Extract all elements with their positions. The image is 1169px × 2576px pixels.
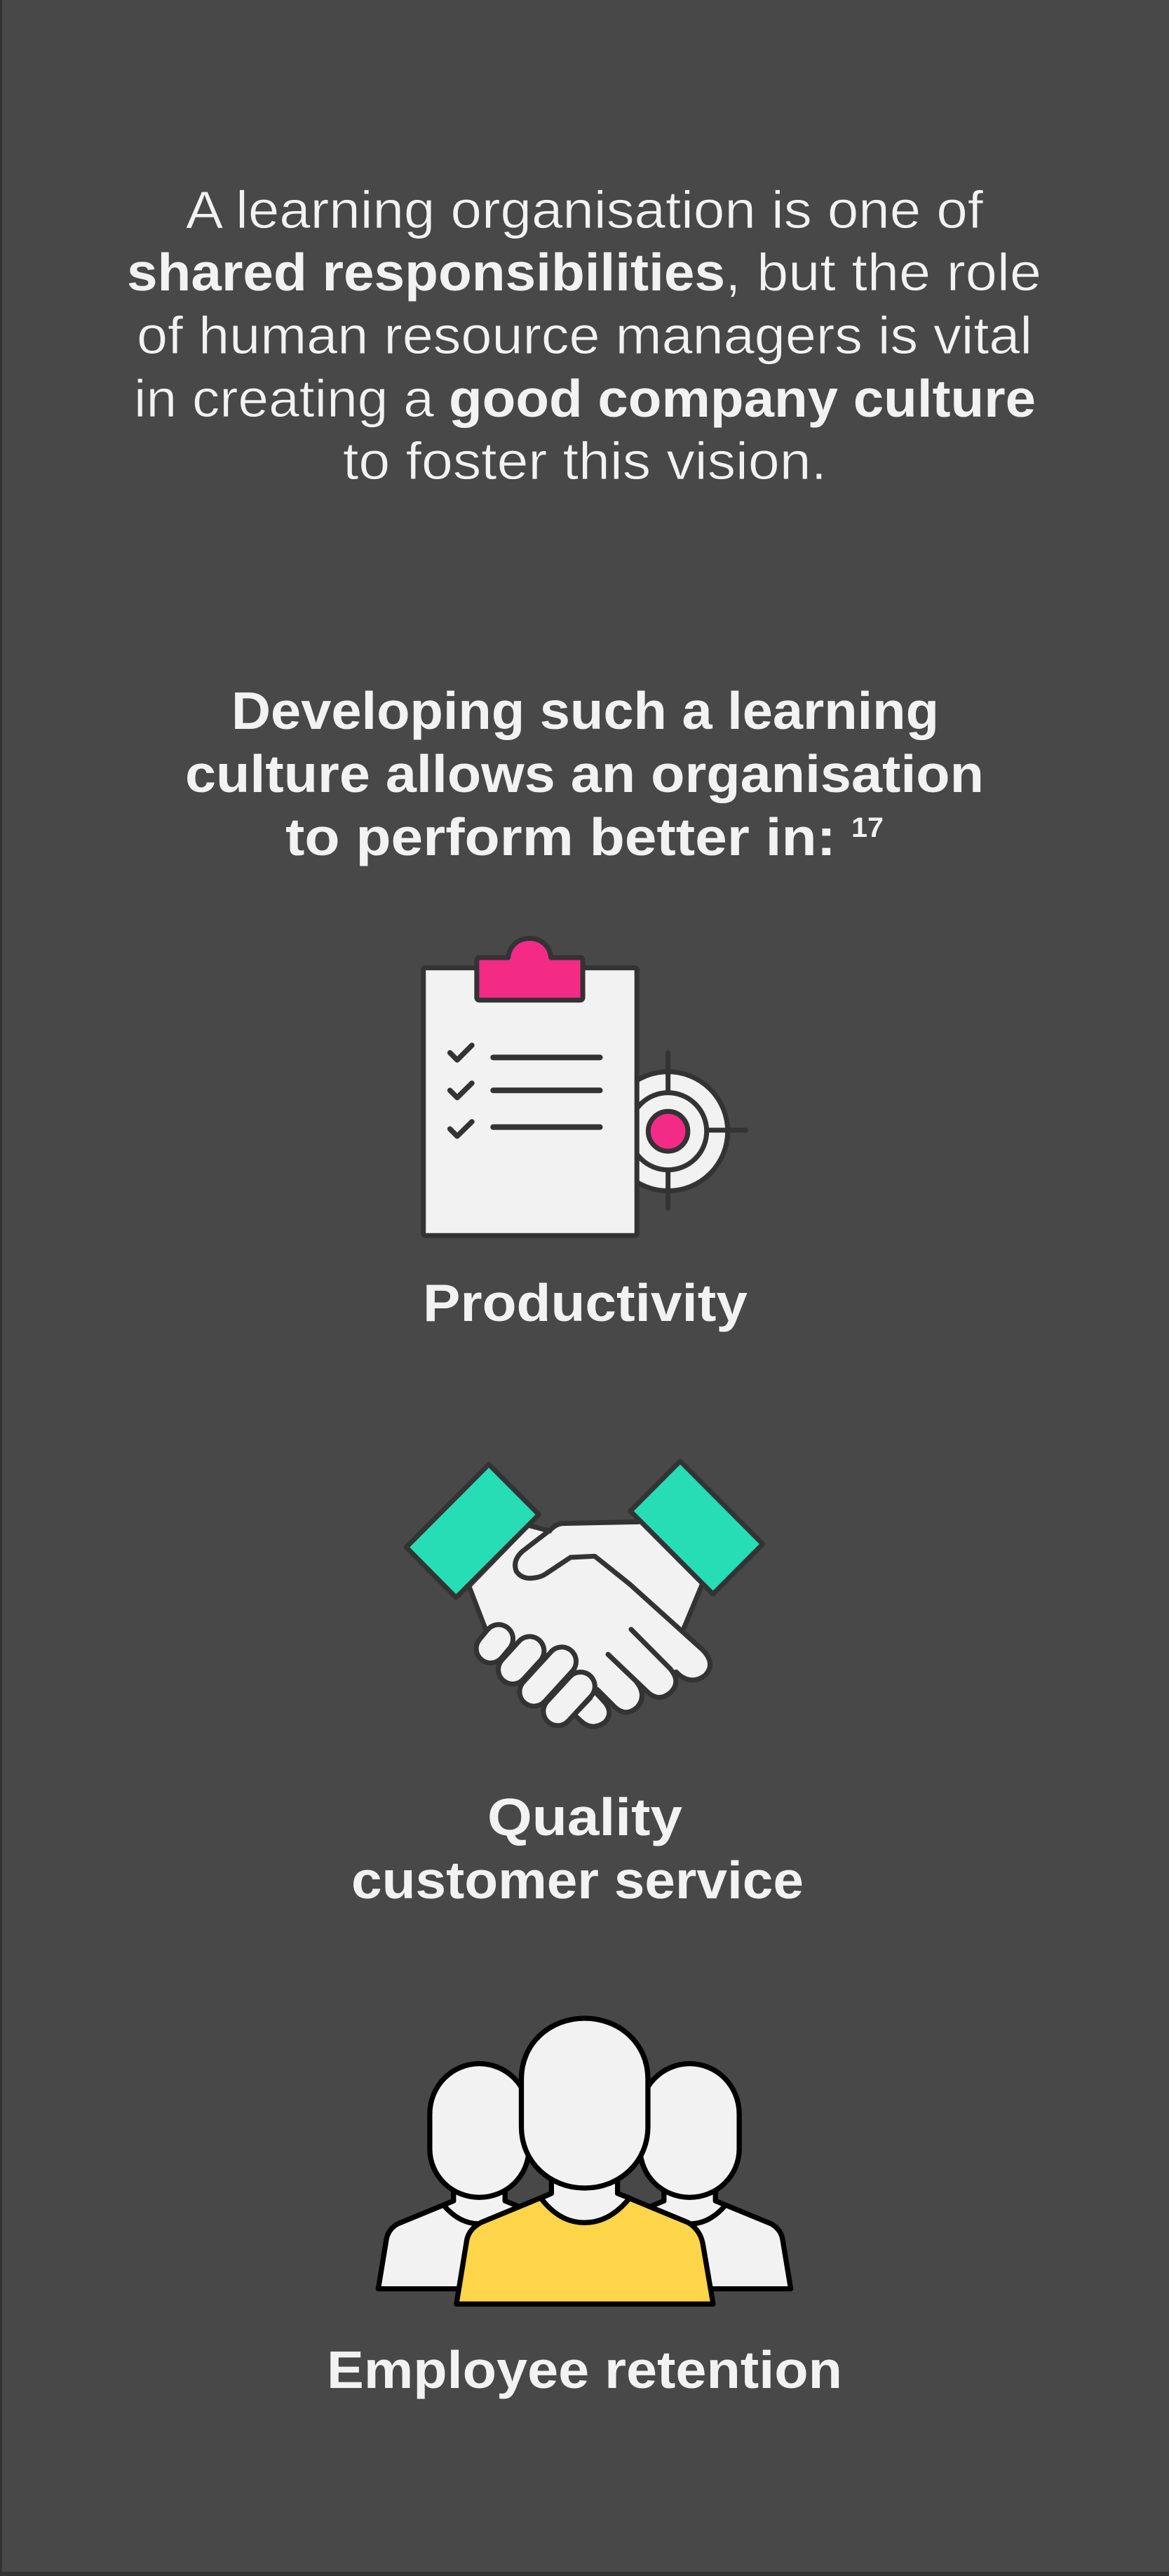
heading: to perform better in: (285, 807, 836, 866)
intro text block (127, 180, 1041, 490)
icon: three employees (378, 2018, 791, 2304)
target (609, 1053, 746, 1208)
heading: 17 (851, 812, 884, 843)
intro text block: to foster this vision. (343, 431, 827, 490)
right cuff (630, 1461, 763, 1594)
clipboard clip (477, 939, 583, 1000)
label: productivity: Productivity (423, 1273, 748, 1332)
heading: culture allows an organisation (185, 744, 984, 803)
centre person (457, 2018, 713, 2304)
intro text block: good company culture (449, 369, 1036, 428)
clipboard sheet (424, 968, 637, 1235)
left cuff (406, 1464, 539, 1597)
heading: Developing such a learning (231, 681, 939, 740)
label: employee retention: Employee retention (327, 2340, 842, 2399)
intro text block: in creating a (134, 369, 434, 428)
left person (378, 2064, 529, 2289)
intro text block: , but the role (725, 243, 1041, 302)
label: quality customer service: customer service (351, 1851, 804, 1910)
checklist (450, 1045, 600, 1136)
label: quality customer service (351, 1787, 804, 1910)
right person (640, 2064, 791, 2289)
heading (185, 681, 984, 866)
icon: handshake (406, 1461, 763, 1726)
intro text block: shared responsibilities (127, 243, 725, 302)
hands (470, 1522, 710, 1726)
icon: clipboard with target (424, 939, 746, 1235)
intro text block: A learning organisation is one of (186, 180, 983, 239)
label: quality customer service: Quality (487, 1787, 682, 1846)
intro text block: of human resource managers is vital (137, 306, 1032, 365)
